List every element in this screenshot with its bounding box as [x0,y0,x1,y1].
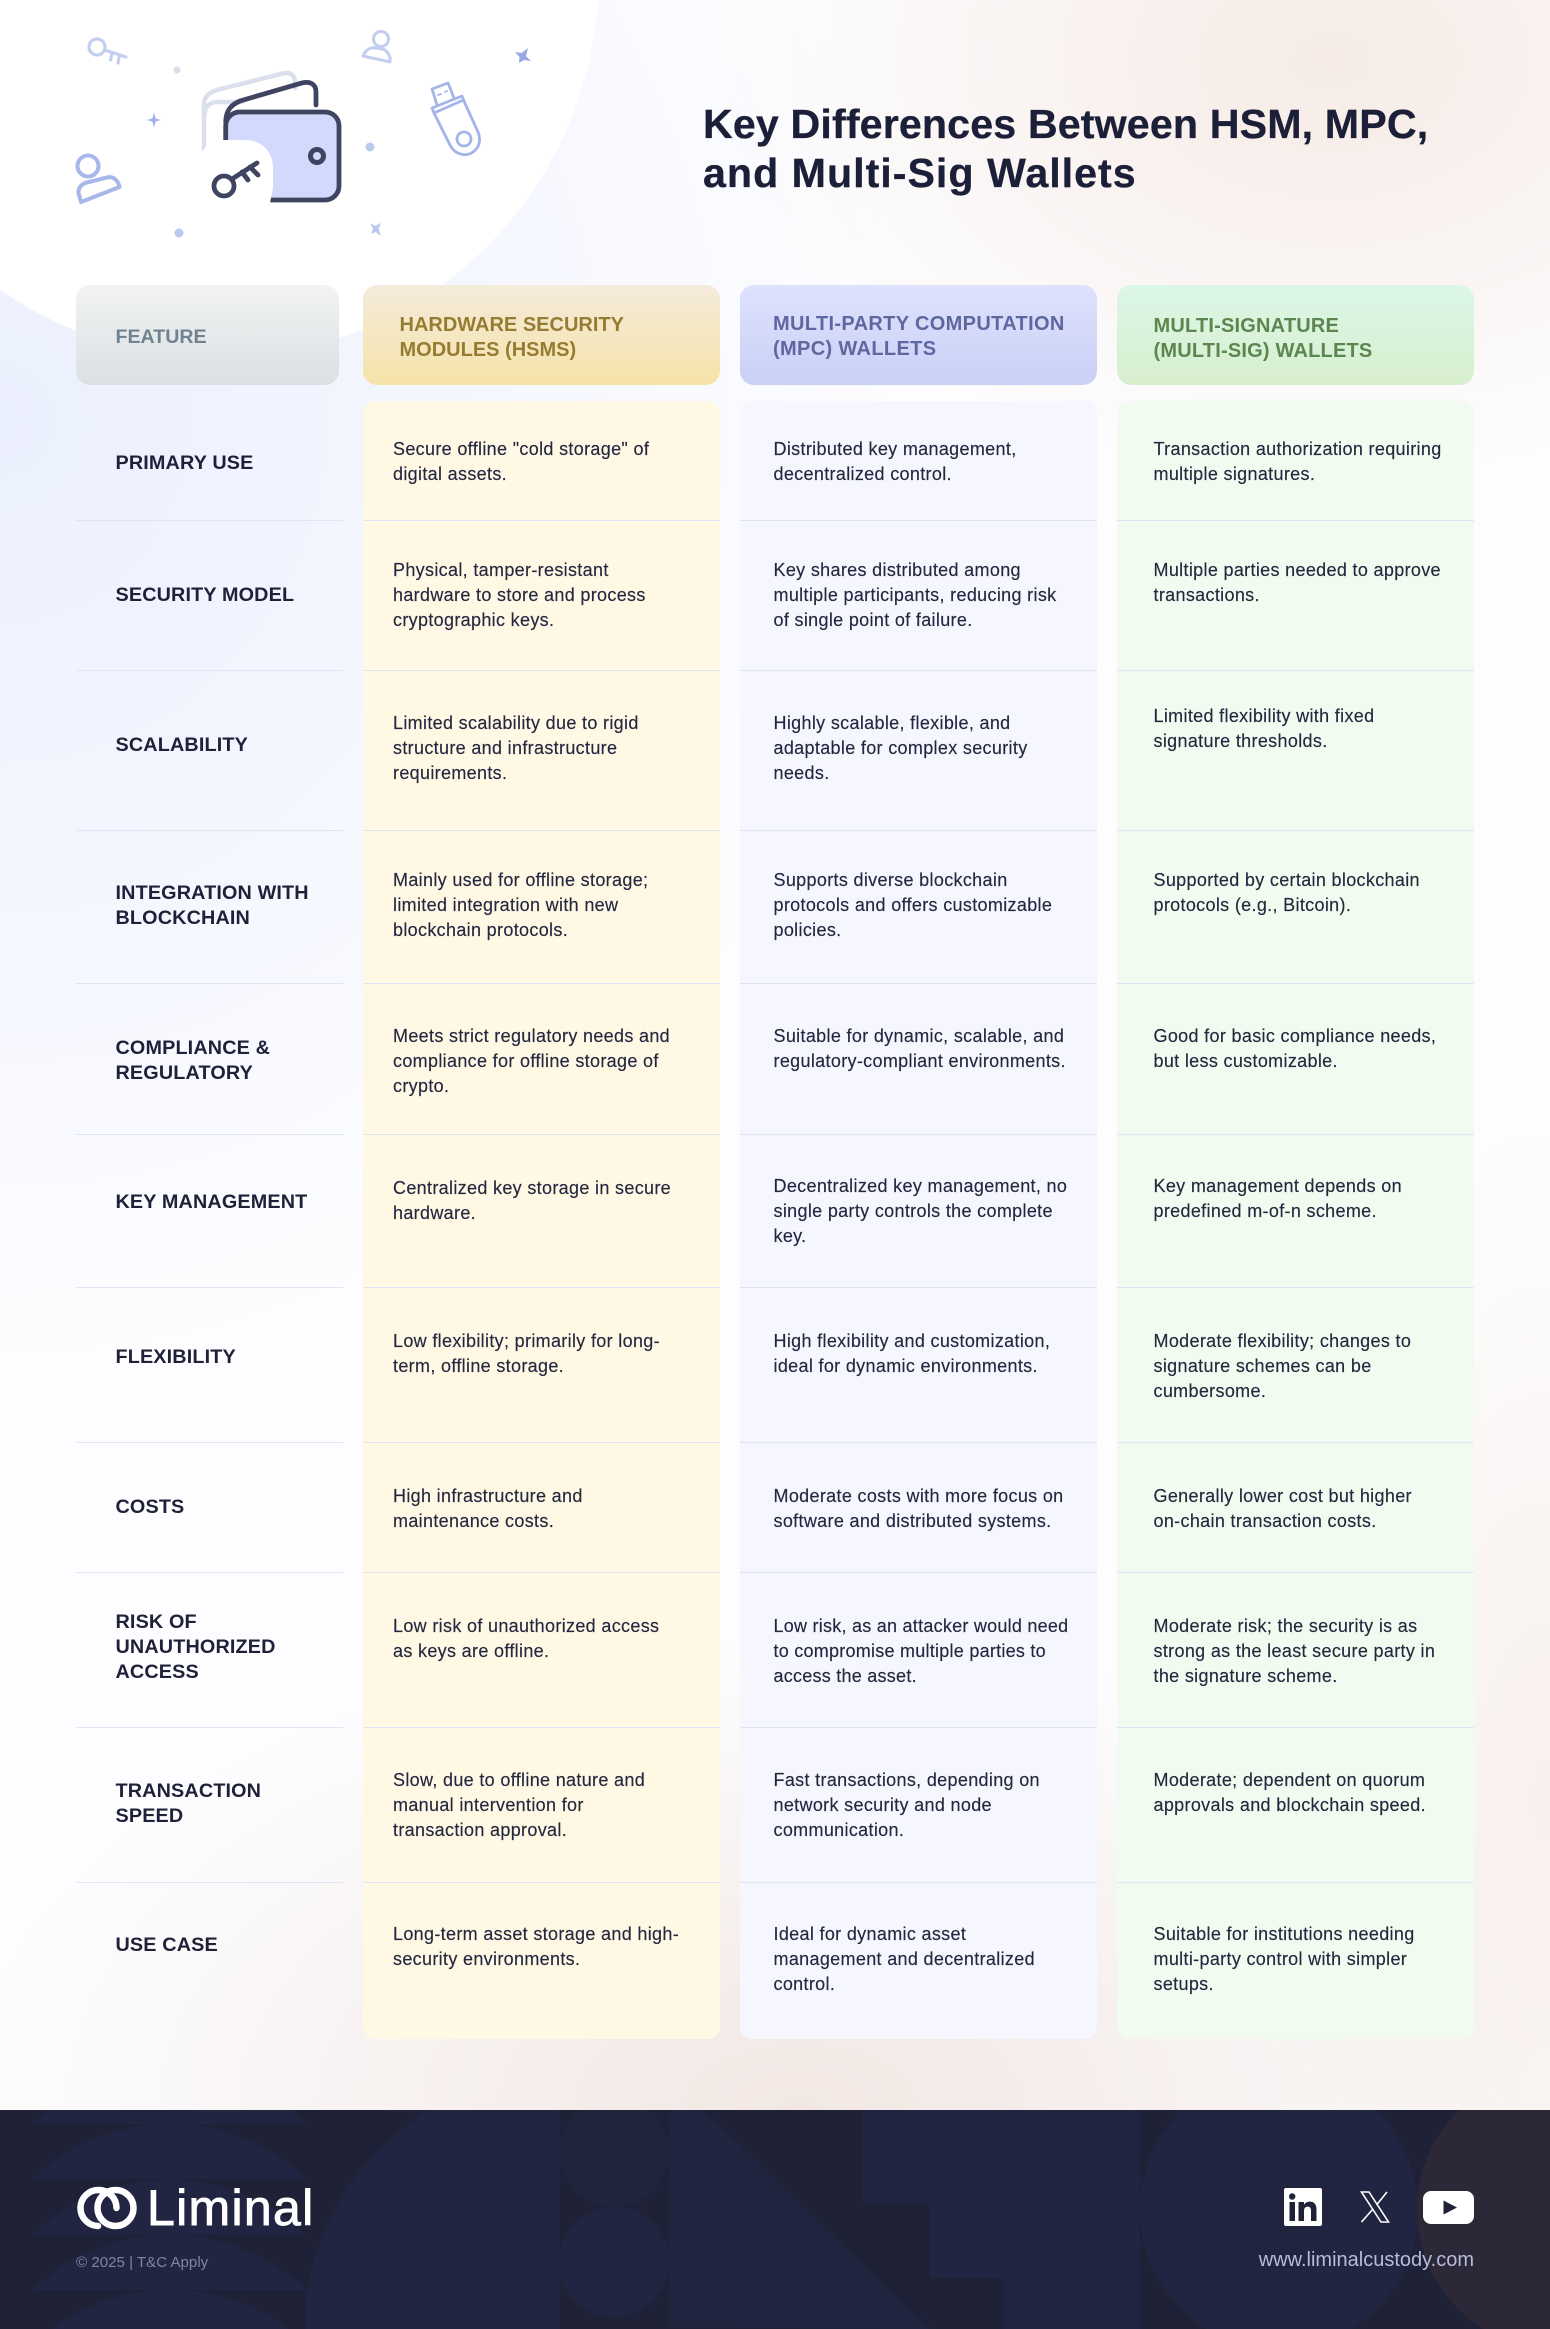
label: integration with blockchain: INTEGRATION WITH [116,882,309,904]
cell: HSM compliance [393,1026,670,1096]
illustration: wallet and key with security icons [76,30,531,238]
cell: HSM risk: Low risk of unauthorized access [393,1616,659,1636]
cell: Multi-sig risk: strong as the least secure party in [1154,1641,1435,1661]
cell: MPC primary use: decentralized control. [774,464,952,484]
cell: Multi-sig integration [1154,870,1420,916]
label: transaction speed [116,1780,261,1827]
cell: MPC costs: Moderate costs with more focus on [774,1486,1064,1506]
feature labels column [76,452,343,1956]
cell: HSM speed: Slow, due to offline nature and [393,1770,645,1790]
header: hardware security modules: MODULES (HSMS) [400,338,576,360]
header: feature: FEATURE [116,326,207,348]
copyright: © 2025 | T&C Apply [76,2254,208,2271]
icon: youtube [1423,2191,1474,2224]
cell: MPC risk: to compromise multiple parties to [774,1641,1046,1661]
decorative dots and sparkles [147,66,381,238]
cell: Multi-sig costs: on-chain transaction costs. [1154,1511,1377,1531]
cell: HSM security model: Physical, tamper-resistant [393,560,609,580]
label: transaction speed: TRANSACTION [116,1780,261,1802]
label: risk of unauthorized access [116,1610,276,1682]
cell: Multi-sig compliance [1154,1026,1436,1070]
footer [0,2110,1550,2329]
cell: MPC integration: protocols and offers customizable [774,894,1052,914]
header: multi-signature: (MULTI-SIG) WALLETS [1154,340,1372,362]
cell: HSM scalability: Limited scalability due to rigid [393,713,639,733]
cell: HSM flexibility: Low flexibility; primarily for long- [393,1330,660,1350]
cell: HSM use case [393,1924,679,1970]
cell: HSM costs [393,1486,583,1531]
cell: Multi-sig key management [1154,1176,1402,1222]
panel: MPC column [740,401,1097,2039]
cell: MPC primary use: Distributed key management, [774,438,1017,458]
cell: MPC key management: Decentralized key management, no [774,1176,1067,1196]
cell: MPC scalability [774,713,1028,783]
cell: Multi-sig security model [1154,560,1441,605]
cell: MPC costs: software and distributed systems. [774,1511,1052,1531]
white blob behind key [200,140,273,203]
cell: Multi-sig primary use: Transaction authorization requiring [1154,438,1442,458]
icon: key [214,163,258,196]
header: multi-party computation: (MPC) WALLETS [773,338,936,360]
cell: Multi-sig risk: Moderate risk; the security is as [1154,1616,1417,1636]
header: multi-party computation: MULTI-PARTY COMPUTATION [773,312,1065,334]
cell: Multi-sig use case: multi-party control with simpler [1154,1949,1407,1969]
cell: Multi-sig flexibility: cumbersome. [1154,1380,1266,1400]
cell: HSM scalability [393,713,639,784]
label: integration with blockchain [116,882,309,929]
cell: HSM risk: as keys are offline. [393,1641,549,1661]
label: scalability: SCALABILITY [116,734,248,756]
label: compliance and regulatory [116,1037,270,1084]
icon: back wallet [204,73,295,150]
cell: HSM speed: transaction approval. [393,1820,567,1840]
cell: HSM risk [393,1616,659,1662]
cell: HSM use case: Long-term asset storage and high- [393,1924,679,1944]
cell: HSM security model: cryptographic keys. [393,610,554,630]
cell: Multi-sig flexibility: signature schemes can be [1154,1356,1372,1376]
cell: MPC speed: Fast transactions, depending on [774,1770,1040,1790]
icon: X [1360,2191,1391,2223]
cell: Multi-sig flexibility [1154,1330,1411,1400]
cell: MPC use case: control. [774,1974,835,1994]
cell: MPC flexibility [774,1330,1050,1376]
icon: linkedin [1284,2188,1322,2226]
cell: MPC risk [774,1616,1068,1686]
cell: HSM compliance: compliance for offline storage of [393,1050,659,1070]
cell: HSM speed [393,1770,645,1840]
cell: MPC primary use [774,438,1017,484]
footer background geometric shapes [0,2110,1550,2329]
panel: Multi-sig column [1117,401,1474,2039]
cell: Multi-sig key management: predefined m-of-n scheme. [1154,1200,1377,1220]
header: feature [76,285,339,385]
label: security model: SECURITY MODEL [116,584,294,606]
label: flexibility: FLEXIBILITY [116,1346,236,1368]
cell: HSM primary use [393,438,649,484]
cell: Multi-sig compliance: but less customizable. [1154,1050,1338,1070]
background circle [0,0,546,338]
cell: Multi-sig costs: Generally lower cost but higher [1154,1486,1412,1506]
header: multi-signature [1117,285,1474,385]
cell: MPC security model [774,560,1056,630]
cell: Multi-sig key management: Key management depends on [1154,1176,1402,1196]
label: primary use: PRIMARY USE [116,452,253,474]
cell: MPC compliance [774,1026,1066,1072]
icon: small key [89,39,126,63]
cell: HSM costs: maintenance costs. [393,1511,554,1531]
cell: MPC flexibility: ideal for dynamic environments. [774,1356,1038,1376]
cell: MPC key management: key. [774,1226,806,1246]
website url: www.liminalcustody.com [1259,2249,1474,2271]
cell: HSM security model: hardware to store and process [393,585,646,605]
cell: HSM key management: hardware. [393,1202,476,1222]
cell: MPC use case [774,1924,1035,1994]
label: costs: COSTS [116,1496,184,1518]
cell: Multi-sig use case: Suitable for institutions needing [1154,1924,1415,1944]
cell: MPC security model: multiple participants, reducing risk [774,585,1056,605]
logo wordmark: Liminal [147,2180,314,2236]
title: and Multi-Sig Wallets [703,150,1137,196]
cell: MPC security model: of single point of failure. [774,610,973,630]
cell: HSM primary use: Secure offline "cold storage" of [393,438,649,458]
label: compliance and regulatory: REGULATORY [116,1062,253,1084]
cell: Multi-sig scalability: signature thresholds. [1154,730,1328,750]
cell: HSM key management: Centralized key storage in secure [393,1178,671,1198]
cell: Multi-sig speed [1154,1770,1426,1816]
cell: MPC scalability: needs. [774,763,830,783]
header: hardware security modules: HARDWARE SECURITY [400,314,624,336]
icon: person top [363,32,390,62]
cell: Multi-sig primary use [1154,438,1442,484]
icon: usb drive [432,83,480,155]
cell: Multi-sig risk: the signature scheme. [1154,1666,1338,1686]
logo mark: interlocked rings [76,2185,140,2231]
icon: wallet [226,82,339,200]
cell: Multi-sig use case: setups. [1154,1974,1214,1994]
label: risk of unauthorized access: UNAUTHORIZED [116,1636,276,1658]
header: hardware security modules [363,285,720,385]
logo: Liminal [76,2180,316,2236]
title: Key Differences Between HSM, MPC, [703,101,1428,147]
cell: HSM key management [393,1178,671,1222]
cell: MPC security model: Key shares distributed among [774,560,1021,580]
cell: MPC integration: Supports diverse blockchain [774,870,1008,890]
header: multi-party computation [740,285,1097,385]
cell: HSM flexibility [393,1330,660,1376]
cell: Multi-sig risk [1154,1616,1435,1686]
label: transaction speed: SPEED [116,1805,183,1827]
label: integration with blockchain: BLOCKCHAIN [116,907,250,929]
icon: star top right [515,48,531,63]
label: key management: KEY MANAGEMENT [116,1191,307,1213]
cell: MPC key management [774,1176,1067,1246]
cell: MPC speed [774,1770,1040,1840]
cell: HSM security model [393,560,646,630]
cell: Multi-sig integration: protocols (e.g., Bitcoin). [1154,894,1351,914]
cell: MPC scalability: adaptable for complex security [774,738,1028,758]
cell: MPC integration: policies. [774,920,842,940]
header: multi-signature: MULTI-SIGNATURE [1154,315,1339,337]
cell: Multi-sig scalability: Limited flexibility with fixed [1154,706,1374,726]
cell: HSM scalability: structure and infrastructure [393,738,617,758]
label: risk of unauthorized access: RISK OF [116,1610,197,1632]
cell: MPC key management: single party controls the complete [774,1200,1053,1220]
icon: person left [78,156,120,202]
cell: Multi-sig integration: Supported by certain blockchain [1154,870,1420,890]
label: risk of unauthorized access: ACCESS [116,1660,199,1682]
cell: Multi-sig speed: approvals and blockchain speed. [1154,1795,1426,1815]
cell: Multi-sig speed: Moderate; dependent on quorum [1154,1770,1425,1790]
cell: MPC compliance: Suitable for dynamic, scalable, and [774,1026,1064,1046]
cell: MPC use case: Ideal for dynamic asset [774,1924,966,1944]
label: compliance and regulatory: COMPLIANCE & [116,1037,270,1059]
cell: Multi-sig security model: transactions. [1154,585,1260,605]
cell: MPC compliance: regulatory-compliant environments. [774,1050,1066,1070]
cell: MPC use case: management and decentralized [774,1949,1035,1969]
cell: HSM integration: limited integration with new [393,894,618,914]
cell: HSM primary use: digital assets. [393,464,507,484]
cell: Multi-sig primary use: multiple signatures. [1154,464,1315,484]
cell: HSM compliance: crypto. [393,1076,449,1096]
cell: Multi-sig costs [1154,1486,1412,1531]
cell: MPC speed: network security and node [774,1795,992,1815]
cell: HSM speed: manual intervention for [393,1795,584,1815]
cell: HSM integration: Mainly used for offline storage; [393,870,648,890]
cell: HSM integration: blockchain protocols. [393,920,568,940]
cell: MPC costs [774,1486,1064,1532]
cell: MPC flexibility: High flexibility and customization, [774,1330,1050,1350]
cell: HSM compliance: Meets strict regulatory needs and [393,1026,670,1046]
cell: MPC risk: access the asset. [774,1666,917,1686]
cell: MPC integration [774,870,1052,940]
cell: HSM use case: security environments. [393,1949,580,1969]
title [703,101,1428,196]
cell: MPC speed: communication. [774,1820,904,1840]
cell: HSM scalability: requirements. [393,763,507,783]
label: use case: USE CASE [116,1934,218,1956]
cell: HSM flexibility: term, offline storage. [393,1356,564,1376]
cell: HSM integration [393,870,648,940]
cell: Multi-sig compliance: Good for basic compliance needs, [1154,1026,1436,1046]
cell: Multi-sig flexibility: Moderate flexibility; changes to [1154,1330,1411,1350]
panel: HSM column [363,401,720,2039]
cell: MPC scalability: Highly scalable, flexible, and [774,713,1011,733]
cell: Multi-sig scalability [1154,706,1374,752]
cell: MPC risk: Low risk, as an attacker would need [774,1616,1068,1636]
cell: Multi-sig security model: Multiple parties needed to approve [1154,560,1441,580]
cell: HSM costs: High infrastructure and [393,1486,583,1506]
cell: Multi-sig use case [1154,1922,1415,1997]
